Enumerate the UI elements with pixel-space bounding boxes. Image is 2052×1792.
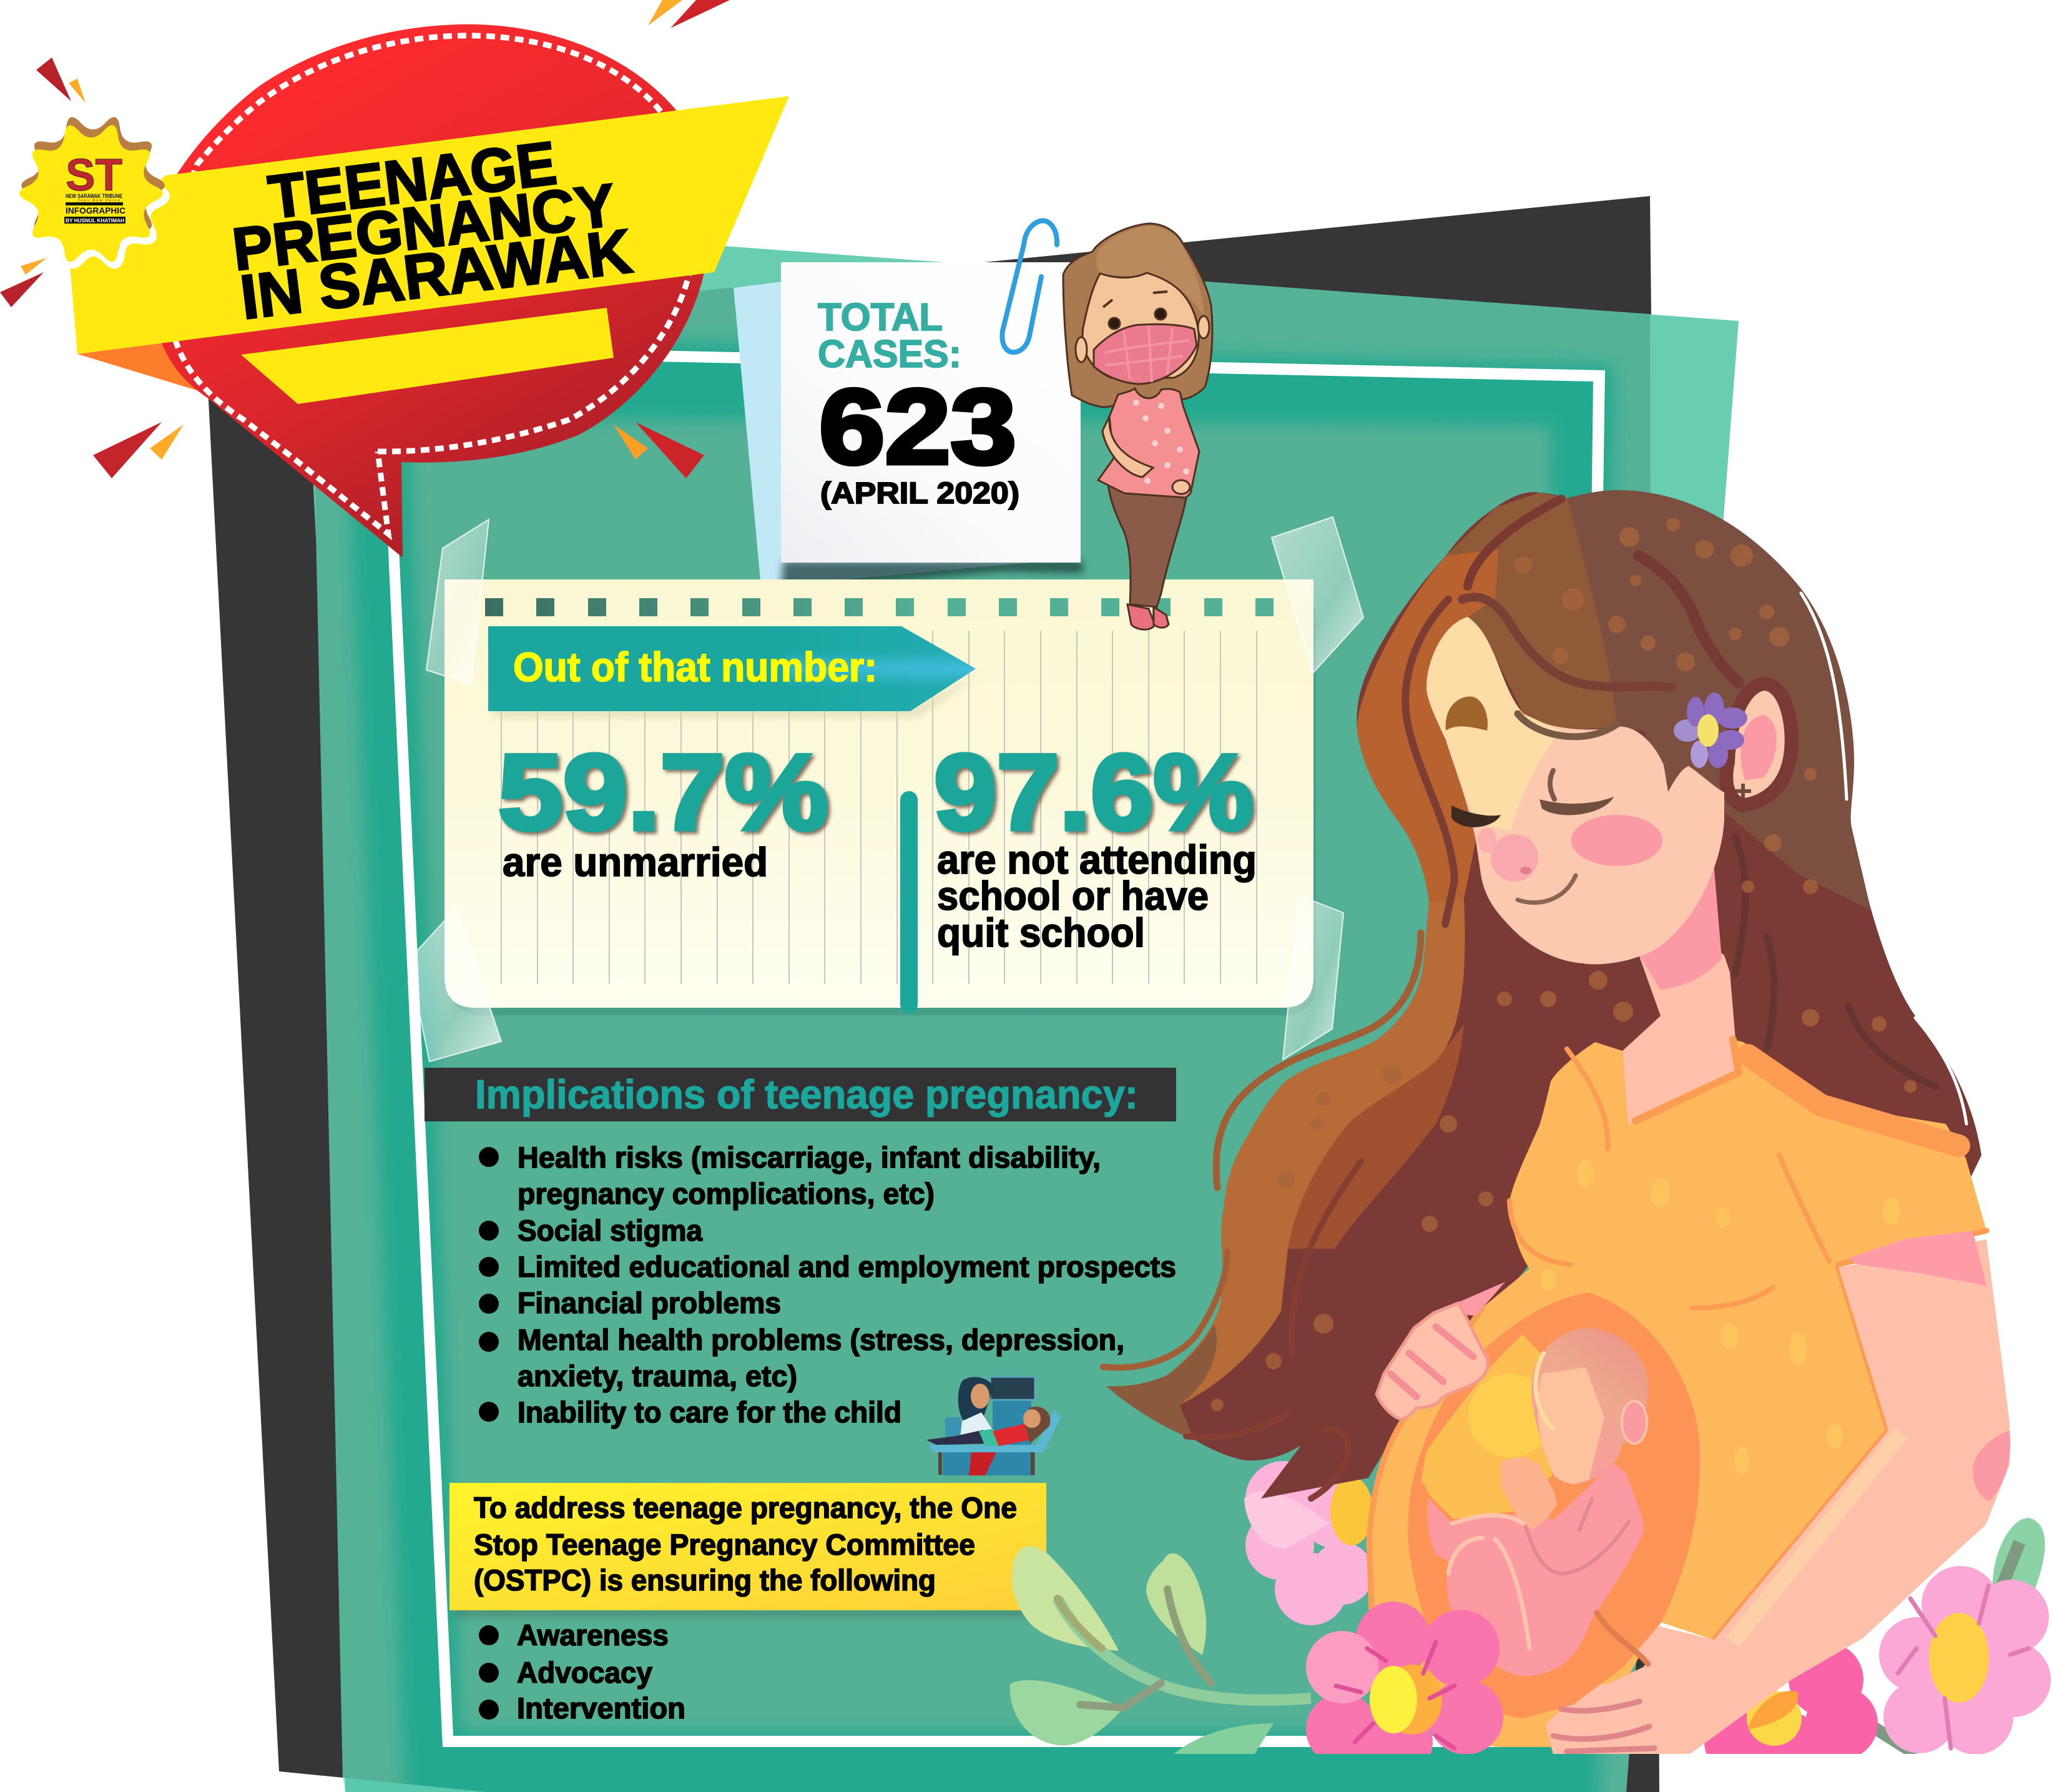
shirt trims — [1369, 1040, 1986, 1640]
icon: ultrasound scene — [926, 1377, 1061, 1475]
fetus face — [1538, 1367, 1604, 1484]
hair lighter brown — [1446, 493, 1617, 731]
stat: not attending school: quit school — [937, 910, 1145, 955]
fetus lines — [1525, 1499, 1629, 1573]
title text: TEENAGE — [265, 128, 560, 232]
hair strands — [1103, 499, 1966, 1499]
shirt — [1369, 1040, 1986, 1747]
notebook paper — [444, 579, 1313, 1008]
background flowers — [1244, 1461, 2051, 1786]
panel: mid teal sheet — [312, 264, 1653, 1792]
panel: implications — [425, 1068, 1176, 1429]
amniotic fluid — [1421, 1334, 1552, 1519]
hair speckles — [1211, 518, 1917, 1411]
ears — [1076, 316, 1209, 362]
doctor — [958, 1377, 993, 1424]
arrow banner — [488, 626, 981, 717]
total cases label: CASES: — [818, 333, 961, 376]
eyes and brows — [1103, 292, 1167, 329]
face features — [1446, 696, 1751, 903]
implications list — [518, 1141, 1176, 1429]
fetus head — [1531, 1328, 1648, 1484]
implications list: Health risks (miscarriage, infant disability, — [518, 1141, 1101, 1174]
hair crown — [1096, 226, 1204, 315]
neck shadow — [1639, 862, 1722, 990]
mask plaid — [1105, 326, 1189, 382]
patient — [926, 1430, 988, 1445]
illustration: pregnant woman with flowers — [1103, 490, 2051, 1786]
logo badge — [19, 117, 165, 264]
fetus body — [1428, 1463, 1644, 1676]
logo badge: NEW SARAWAK TRIBUNE — [66, 193, 122, 200]
shirt texture — [1540, 1160, 1900, 1475]
callout: OSTPC box: (OSTPC) is ensuring the following — [474, 1563, 936, 1597]
list: OSTPC actions — [479, 1618, 685, 1725]
implications list: Limited educational and employment prospects — [518, 1250, 1176, 1283]
icon: purple hair flower — [1674, 692, 1747, 768]
hair left orange tone — [1106, 899, 1465, 1405]
list: OSTPC actions: Advocacy — [517, 1656, 652, 1689]
panel: out of that number notebook — [408, 517, 1363, 1061]
shoes — [1127, 604, 1169, 629]
panel: dark backing sheet — [205, 196, 1659, 1792]
notebook holes — [485, 598, 1274, 616]
arm and hands — [1102, 416, 1153, 477]
stat: not attending school: are not attending — [937, 837, 1257, 882]
womb — [1408, 1292, 1700, 1718]
dress — [1098, 388, 1199, 498]
panel: white frame with teal interior — [379, 345, 1605, 1747]
implications list: pregnancy complications, etc) — [518, 1177, 935, 1210]
elbow blush — [1973, 1430, 2010, 1501]
total cases label: TOTAL — [818, 296, 943, 339]
logo badge: INFOGRAPHIC — [66, 205, 125, 215]
fetus hands — [1500, 1457, 1557, 1530]
title text: PREGNANCY — [229, 172, 619, 283]
stat: unmarried: 59.7% — [498, 732, 828, 852]
logo badge: Your New Voice — [77, 199, 120, 202]
forehead highlight — [1426, 617, 1561, 830]
background: layered panels — [205, 196, 1739, 1792]
lower hand — [1553, 1613, 1654, 1751]
icon: paperclip — [1002, 220, 1057, 352]
arrow text: Out of that number: — [513, 644, 877, 690]
callout: OSTPC box — [449, 1483, 1046, 1616]
face — [1082, 273, 1199, 378]
callout: OSTPC box: To address teenage pregnancy, the One — [474, 1491, 1017, 1524]
list: OSTPC actions: Awareness — [517, 1618, 669, 1652]
arm — [1543, 1239, 2010, 1755]
red speech bubble — [154, 24, 710, 558]
logo text: ST — [66, 150, 122, 200]
title badge — [0, 0, 789, 558]
monitor — [990, 1377, 1035, 1400]
dress dots — [1133, 400, 1189, 484]
implications list: Social stigma — [518, 1214, 703, 1247]
stat: not attending school: school or have — [937, 873, 1209, 918]
panel: light teal sheet — [300, 212, 1739, 1792]
sleeve shadow — [1848, 1231, 1986, 1286]
yellow subtitle bar — [241, 308, 614, 404]
hair lower-left brown tone — [1106, 1324, 1217, 1439]
divider — [900, 791, 918, 1013]
illustration: girl in mask — [1063, 224, 1212, 629]
face mask — [1094, 324, 1197, 384]
back note — [734, 270, 1036, 587]
stat: unmarried: are unmarried — [503, 839, 768, 885]
pants — [1108, 481, 1186, 607]
total cases label — [818, 296, 961, 376]
cabinet and pedestal — [943, 1452, 1035, 1475]
fetus — [1428, 1328, 1648, 1676]
hair silhouette — [1106, 490, 1981, 1499]
face — [1426, 617, 1724, 964]
amniotic glow — [1468, 1374, 1552, 1457]
neck — [1622, 924, 1743, 1129]
date: (APRIL 2020) — [820, 477, 1019, 510]
treatment bed — [929, 1410, 1061, 1452]
hair upper tone — [1566, 490, 1871, 910]
ear — [1726, 684, 1792, 805]
panel: total cases note — [734, 220, 1083, 592]
implications heading: Implications of teenage pregnancy: — [475, 1071, 1138, 1117]
logo badge: BY HUSNUL KHATIMAH — [66, 217, 124, 224]
white paper — [781, 262, 1081, 563]
implications bullets — [479, 1147, 499, 1422]
title text — [229, 128, 636, 333]
left hand — [1377, 1282, 1505, 1419]
stat: not attending school — [934, 732, 1257, 955]
callout: OSTPC box: Stop Teenage Pregnancy Committee — [474, 1528, 975, 1561]
confetti triangles — [0, 0, 730, 478]
dashed outline — [170, 36, 696, 534]
illustration: green leaves — [1010, 1546, 1311, 1754]
tape pieces — [408, 517, 1363, 1061]
hair — [1063, 224, 1212, 407]
implications list: Mental health problems (stress, depression, — [518, 1323, 1124, 1356]
fetus ear — [1622, 1401, 1647, 1444]
pink flower foreground — [1306, 1602, 1503, 1776]
ruled lines — [501, 631, 1257, 984]
arm highlight — [1732, 1434, 1901, 1642]
title text: IN SARAWAK — [237, 216, 636, 333]
implications list: anxiety, trauma, etc) — [518, 1359, 797, 1392]
yellow banner — [70, 96, 789, 354]
list: OSTPC actions: Intervention — [517, 1691, 685, 1725]
implications list: Financial problems — [518, 1286, 781, 1319]
ribbon fold — [77, 342, 197, 390]
hair red-brown tone — [1288, 1024, 1464, 1249]
total number: 623 — [819, 368, 1016, 486]
stat: not attending school: 97.6% — [934, 732, 1254, 852]
implications list: Inability to care for the child — [518, 1396, 901, 1429]
hair side strip — [1357, 549, 1498, 902]
